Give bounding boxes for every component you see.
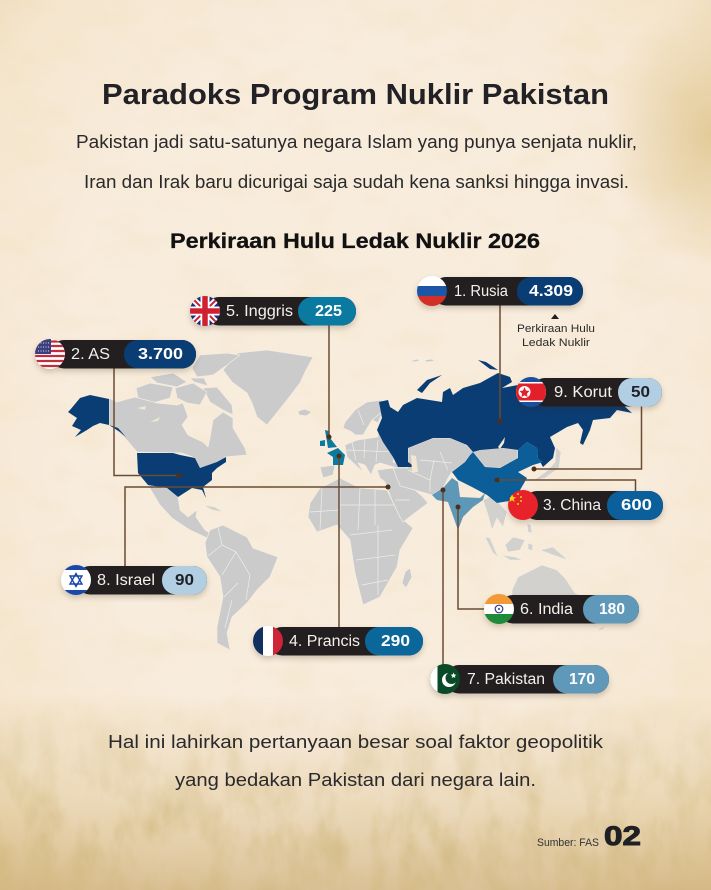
intro text: Iran dan Irak baru dicurigai saja sudah kena sanksi hingga invasi. — [84, 171, 629, 192]
pill: United Kingdom: 225 — [315, 303, 342, 320]
pill: United States: 3.700 — [138, 346, 183, 363]
land: Greenland and Arctic islands — [136, 350, 435, 425]
flag: Russia — [417, 276, 447, 306]
pill: North Korea — [516, 377, 662, 407]
intro text — [76, 131, 637, 192]
world map — [68, 350, 632, 650]
title: Paradoks Program Nuklir Pakistan — [102, 79, 609, 111]
pill: France: 4. Prancis — [289, 633, 360, 650]
pill: Russia: 4.309 — [529, 283, 573, 300]
flag: Pakistan — [430, 664, 460, 694]
pill: Russia — [417, 276, 583, 306]
pill: United Kingdom: 5. Inggris — [226, 303, 293, 320]
flag: United States — [35, 339, 65, 369]
pill: France — [253, 626, 423, 656]
pill: Pakistan: 170 — [569, 671, 595, 688]
legend note: estimated warheads — [517, 314, 595, 349]
closing text: yang bedakan Pakistan dari negara lain. — [175, 769, 536, 790]
flag: France — [253, 626, 283, 656]
pill: United States — [35, 339, 196, 369]
pill: France: 290 — [381, 633, 410, 650]
pill: Pakistan: 7. Pakistan — [467, 671, 545, 688]
flag: North Korea — [516, 377, 546, 407]
legend note: estimated warheads: Ledak Nuklir — [522, 337, 590, 349]
land: Southeast Asia and Oceania — [483, 447, 606, 630]
pill: North Korea: 50 — [631, 384, 650, 401]
land: Canada — [109, 397, 247, 468]
land: Africa — [308, 478, 413, 605]
pill: China — [508, 490, 663, 520]
legend note: estimated warheads: Perkiraan Hulu — [517, 323, 595, 335]
pill: United Kingdom — [190, 296, 356, 326]
land: Mexico and Central America — [148, 485, 213, 538]
country: United States — [68, 395, 226, 498]
pill: Israel: 8. Israel — [97, 572, 155, 589]
pill: India: 6. India — [520, 601, 573, 618]
pill: Israel — [61, 565, 207, 595]
pill: India: 180 — [599, 601, 625, 618]
pill: United States: 2. AS — [71, 346, 110, 363]
connector lines — [114, 305, 642, 666]
connector dots — [176, 418, 536, 510]
closing text — [108, 731, 604, 790]
chart heading: Perkiraan Hulu Ledak Nuklir 2026 — [170, 230, 540, 253]
source note: Sumber: FAS — [537, 837, 599, 849]
pill: Russia: 1. Rusia — [454, 283, 508, 300]
flag: United Kingdom — [190, 296, 220, 326]
pill: Pakistan — [430, 664, 609, 694]
land: Middle East and Central Asia — [377, 438, 518, 522]
intro text: Pakistan jadi satu-satunya negara Islam yang punya senjata nuklir, — [76, 131, 637, 152]
pill: China: 600 — [621, 497, 652, 514]
lake and sea details — [411, 437, 505, 472]
page number: 02 — [604, 821, 641, 851]
land: Caribbean — [203, 505, 223, 512]
pill: India — [484, 594, 639, 624]
country: India and Pakistan — [432, 478, 485, 530]
land: South America — [205, 525, 278, 650]
flag: China — [508, 490, 538, 520]
pill: Israel: 90 — [175, 572, 194, 589]
country: France — [327, 448, 345, 465]
pill: China: 3. China — [543, 497, 601, 514]
closing text: Hal ini lahirkan pertanyaan besar soal faktor geopolitik — [108, 731, 604, 752]
pill: North Korea: 9. Korut — [554, 384, 613, 401]
country: United Kingdom — [320, 430, 337, 448]
flag: Israel — [61, 565, 91, 595]
country: China — [452, 442, 543, 503]
flag: India — [484, 594, 514, 624]
land: Europe — [320, 400, 408, 478]
country: Russia — [377, 360, 632, 467]
